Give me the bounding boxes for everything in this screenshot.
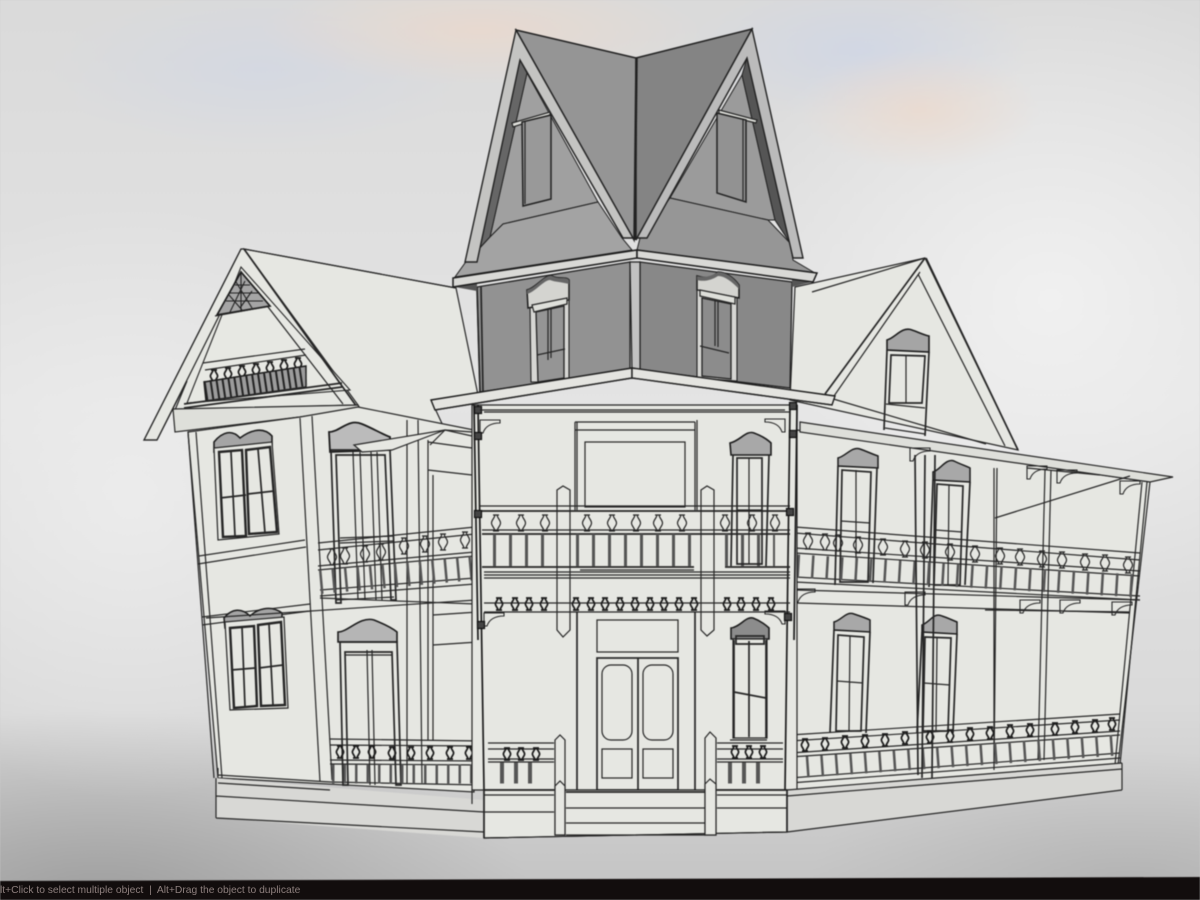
central frieze (480, 419, 785, 626)
status bar hint text: lt+Click to select multiple object | Alt+Drag the object to duplicate (0, 885, 300, 896)
central lower window (730, 618, 769, 740)
gable window (884, 329, 929, 436)
house drawing (144, 29, 1173, 838)
right wing lower balustrade (790, 714, 1120, 783)
front low rail left (488, 743, 554, 773)
post knobs (474, 402, 796, 628)
right wing walls (790, 422, 1173, 790)
gable balcony balustrade (184, 349, 342, 408)
tower left window (527, 276, 569, 382)
left wing gable and roof (144, 249, 478, 440)
left upper tall window (329, 423, 445, 603)
monitor status bar (0, 877, 1200, 900)
porch roof eave (431, 368, 835, 432)
tower wall (455, 262, 812, 392)
left lower tall window (338, 619, 401, 785)
right wing posts and brackets (795, 448, 1140, 778)
left lower double window (224, 608, 288, 710)
right wing windows (830, 448, 970, 733)
left upper double window (214, 430, 279, 540)
main roof planes (516, 29, 752, 240)
left dormer (455, 30, 633, 277)
tower eaves (453, 250, 817, 287)
tower right window (697, 272, 739, 381)
base and steps (216, 732, 1122, 838)
right dormer (637, 29, 815, 273)
central post right (701, 486, 714, 636)
gable lattice vent (215, 272, 270, 316)
front low rail right (717, 743, 783, 773)
left wing lower balustrade (330, 739, 482, 785)
central posts (557, 486, 570, 637)
central upper window (730, 432, 771, 566)
front double door (597, 620, 678, 790)
left wing walls (188, 407, 478, 792)
cornice band (173, 405, 360, 432)
tower roof (453, 29, 817, 287)
left wing upper balustrade (206, 527, 476, 618)
central upper balustrade (480, 506, 790, 570)
central bay (472, 405, 797, 790)
right wing upper balustrade (795, 527, 1140, 600)
right wing gable and roof (790, 258, 1018, 450)
